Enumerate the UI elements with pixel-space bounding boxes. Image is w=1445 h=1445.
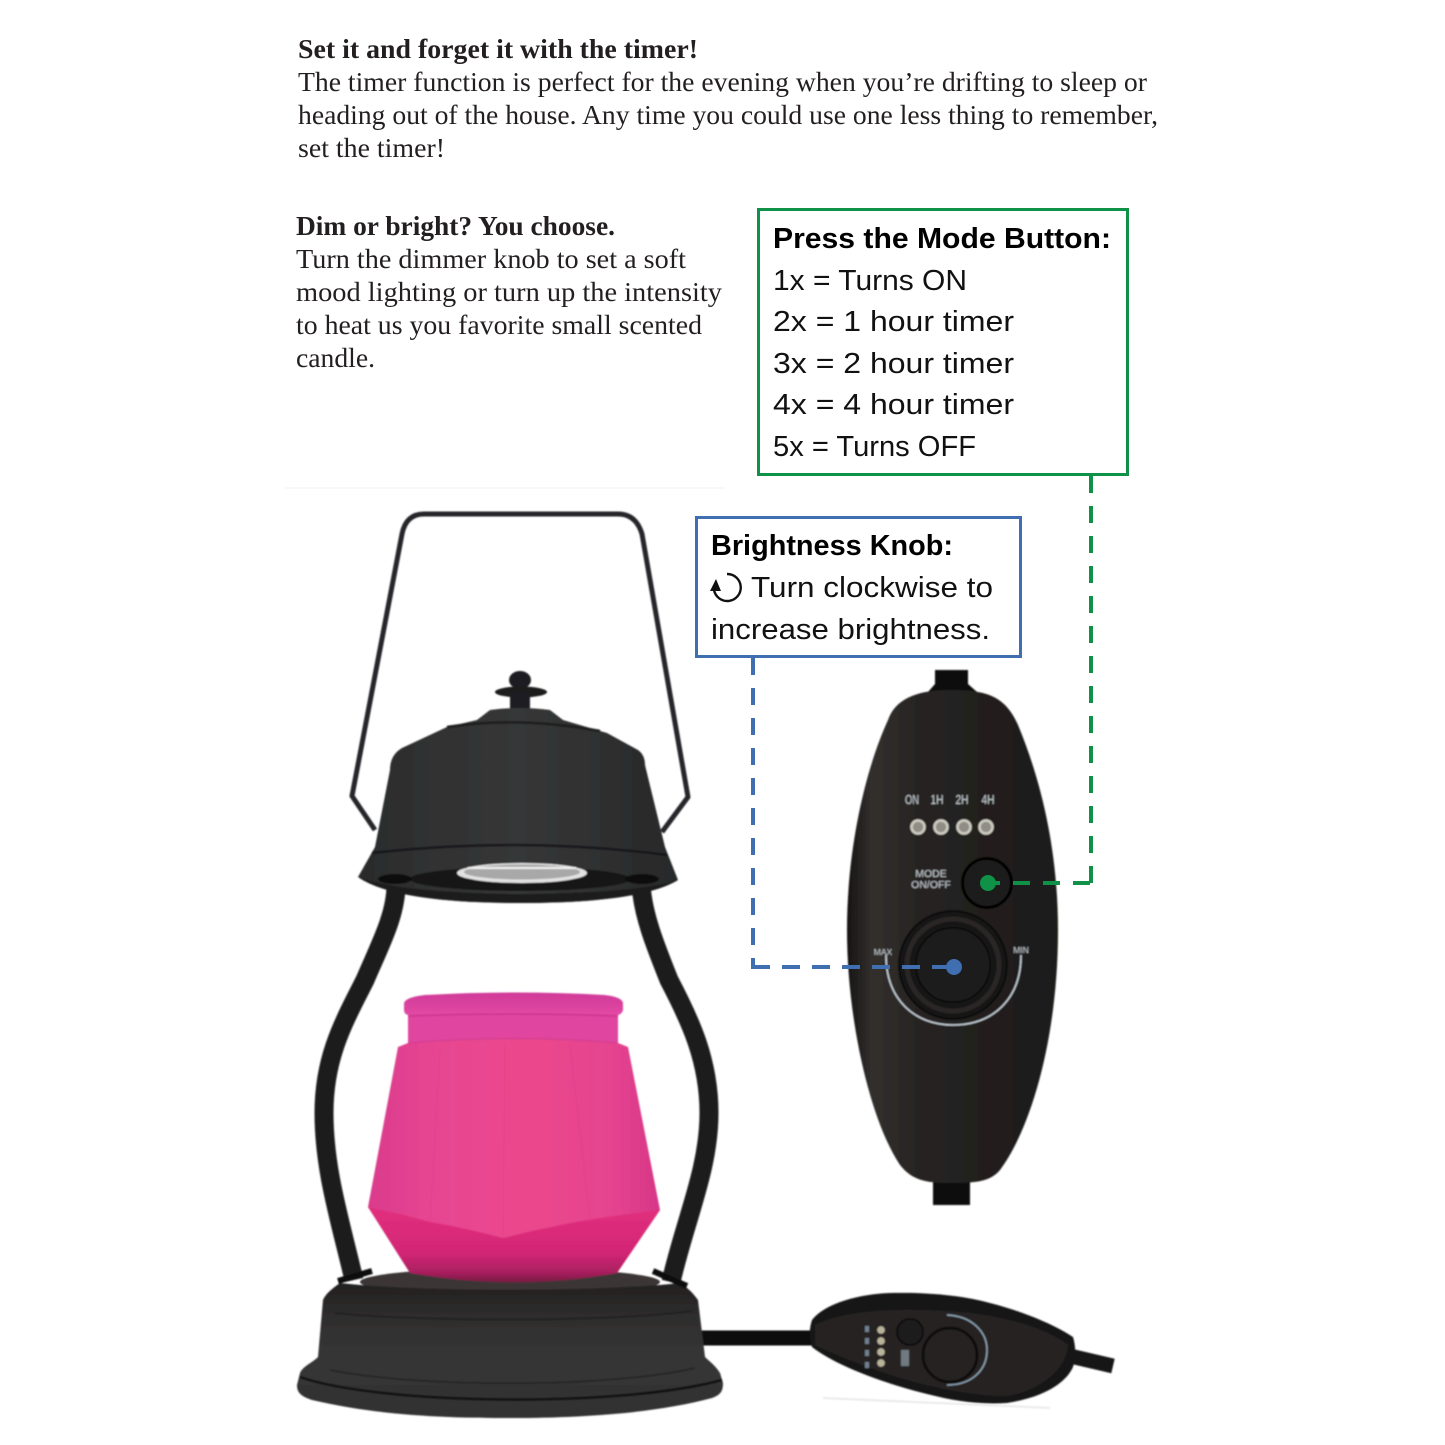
icon: clockwise arrow (710, 574, 741, 601)
LED labels: 2H (956, 792, 968, 807)
text block: dimmer: to heat us you favorite small scented (296, 310, 703, 340)
arm feet (338, 1271, 687, 1286)
lantern handle (352, 514, 688, 832)
LED indicators (912, 820, 992, 834)
mode label: MODE (915, 868, 947, 880)
callout: brightness knob (696, 518, 1020, 656)
large controller photo (847, 670, 1058, 1205)
text block: timer (298, 34, 1158, 163)
text block: timer: set the timer! (298, 133, 445, 163)
callout: mode button: 1x = Turns ON (773, 265, 967, 297)
controller body (847, 690, 1058, 1183)
callout: mode button: Press the Mode Button: (773, 223, 1111, 255)
callout: brightness knob: increase brightness. (711, 614, 990, 646)
text block: dimmer: Turn the dimmer knob to set a soft (296, 244, 687, 274)
candle jar (368, 992, 660, 1282)
callout: mode button: 4x = 4 hour timer (773, 389, 1014, 421)
lantern photo (297, 514, 1113, 1418)
callout: brightness knob: Brightness Knob: (711, 530, 953, 562)
callout: brightness knob: Turn clockwise to (751, 572, 993, 604)
callout: mode button: 3x = 2 hour timer (773, 348, 1014, 380)
callout: mode button (758, 210, 1128, 474)
LED labels: 4H (982, 792, 994, 807)
text block: timer: heading out of the house. Any time you could use one less thing to remember, (298, 100, 1158, 130)
small controller (810, 1293, 1075, 1408)
mode label: ON/OFF (911, 879, 951, 891)
text block: dimmer: candle. (296, 343, 375, 373)
text block: timer: The timer function is perfect for the evening when you’re drifting to sleep or (298, 67, 1147, 97)
controller cords (928, 670, 977, 1205)
brightness scale: MIN (1013, 945, 1029, 955)
brightness scale (874, 945, 1029, 1025)
brightness knob (899, 911, 1007, 1019)
lantern shade (358, 671, 678, 903)
mode label (911, 868, 951, 891)
connector: brightness knob (751, 658, 962, 975)
mode button (962, 858, 1012, 908)
connector: mode button (980, 476, 1093, 891)
callout: mode button: 2x = 1 hour timer (773, 306, 1014, 338)
text block: timer: Set it and forget it with the timer! (298, 34, 698, 64)
lantern arms (324, 885, 709, 1282)
power cord (700, 1330, 812, 1346)
text block: dimmer (296, 211, 723, 373)
text block: dimmer: Dim or bright? You choose. (296, 211, 615, 241)
LED labels: 1H (930, 792, 944, 807)
text block: dimmer: mood lighting or turn up the intensity (296, 277, 723, 307)
lantern base (297, 1268, 723, 1418)
LED labels (905, 792, 994, 807)
callout: mode button: 5x = Turns OFF (773, 431, 976, 463)
brightness scale: MAX (874, 947, 893, 957)
LED labels: ON (905, 792, 919, 807)
